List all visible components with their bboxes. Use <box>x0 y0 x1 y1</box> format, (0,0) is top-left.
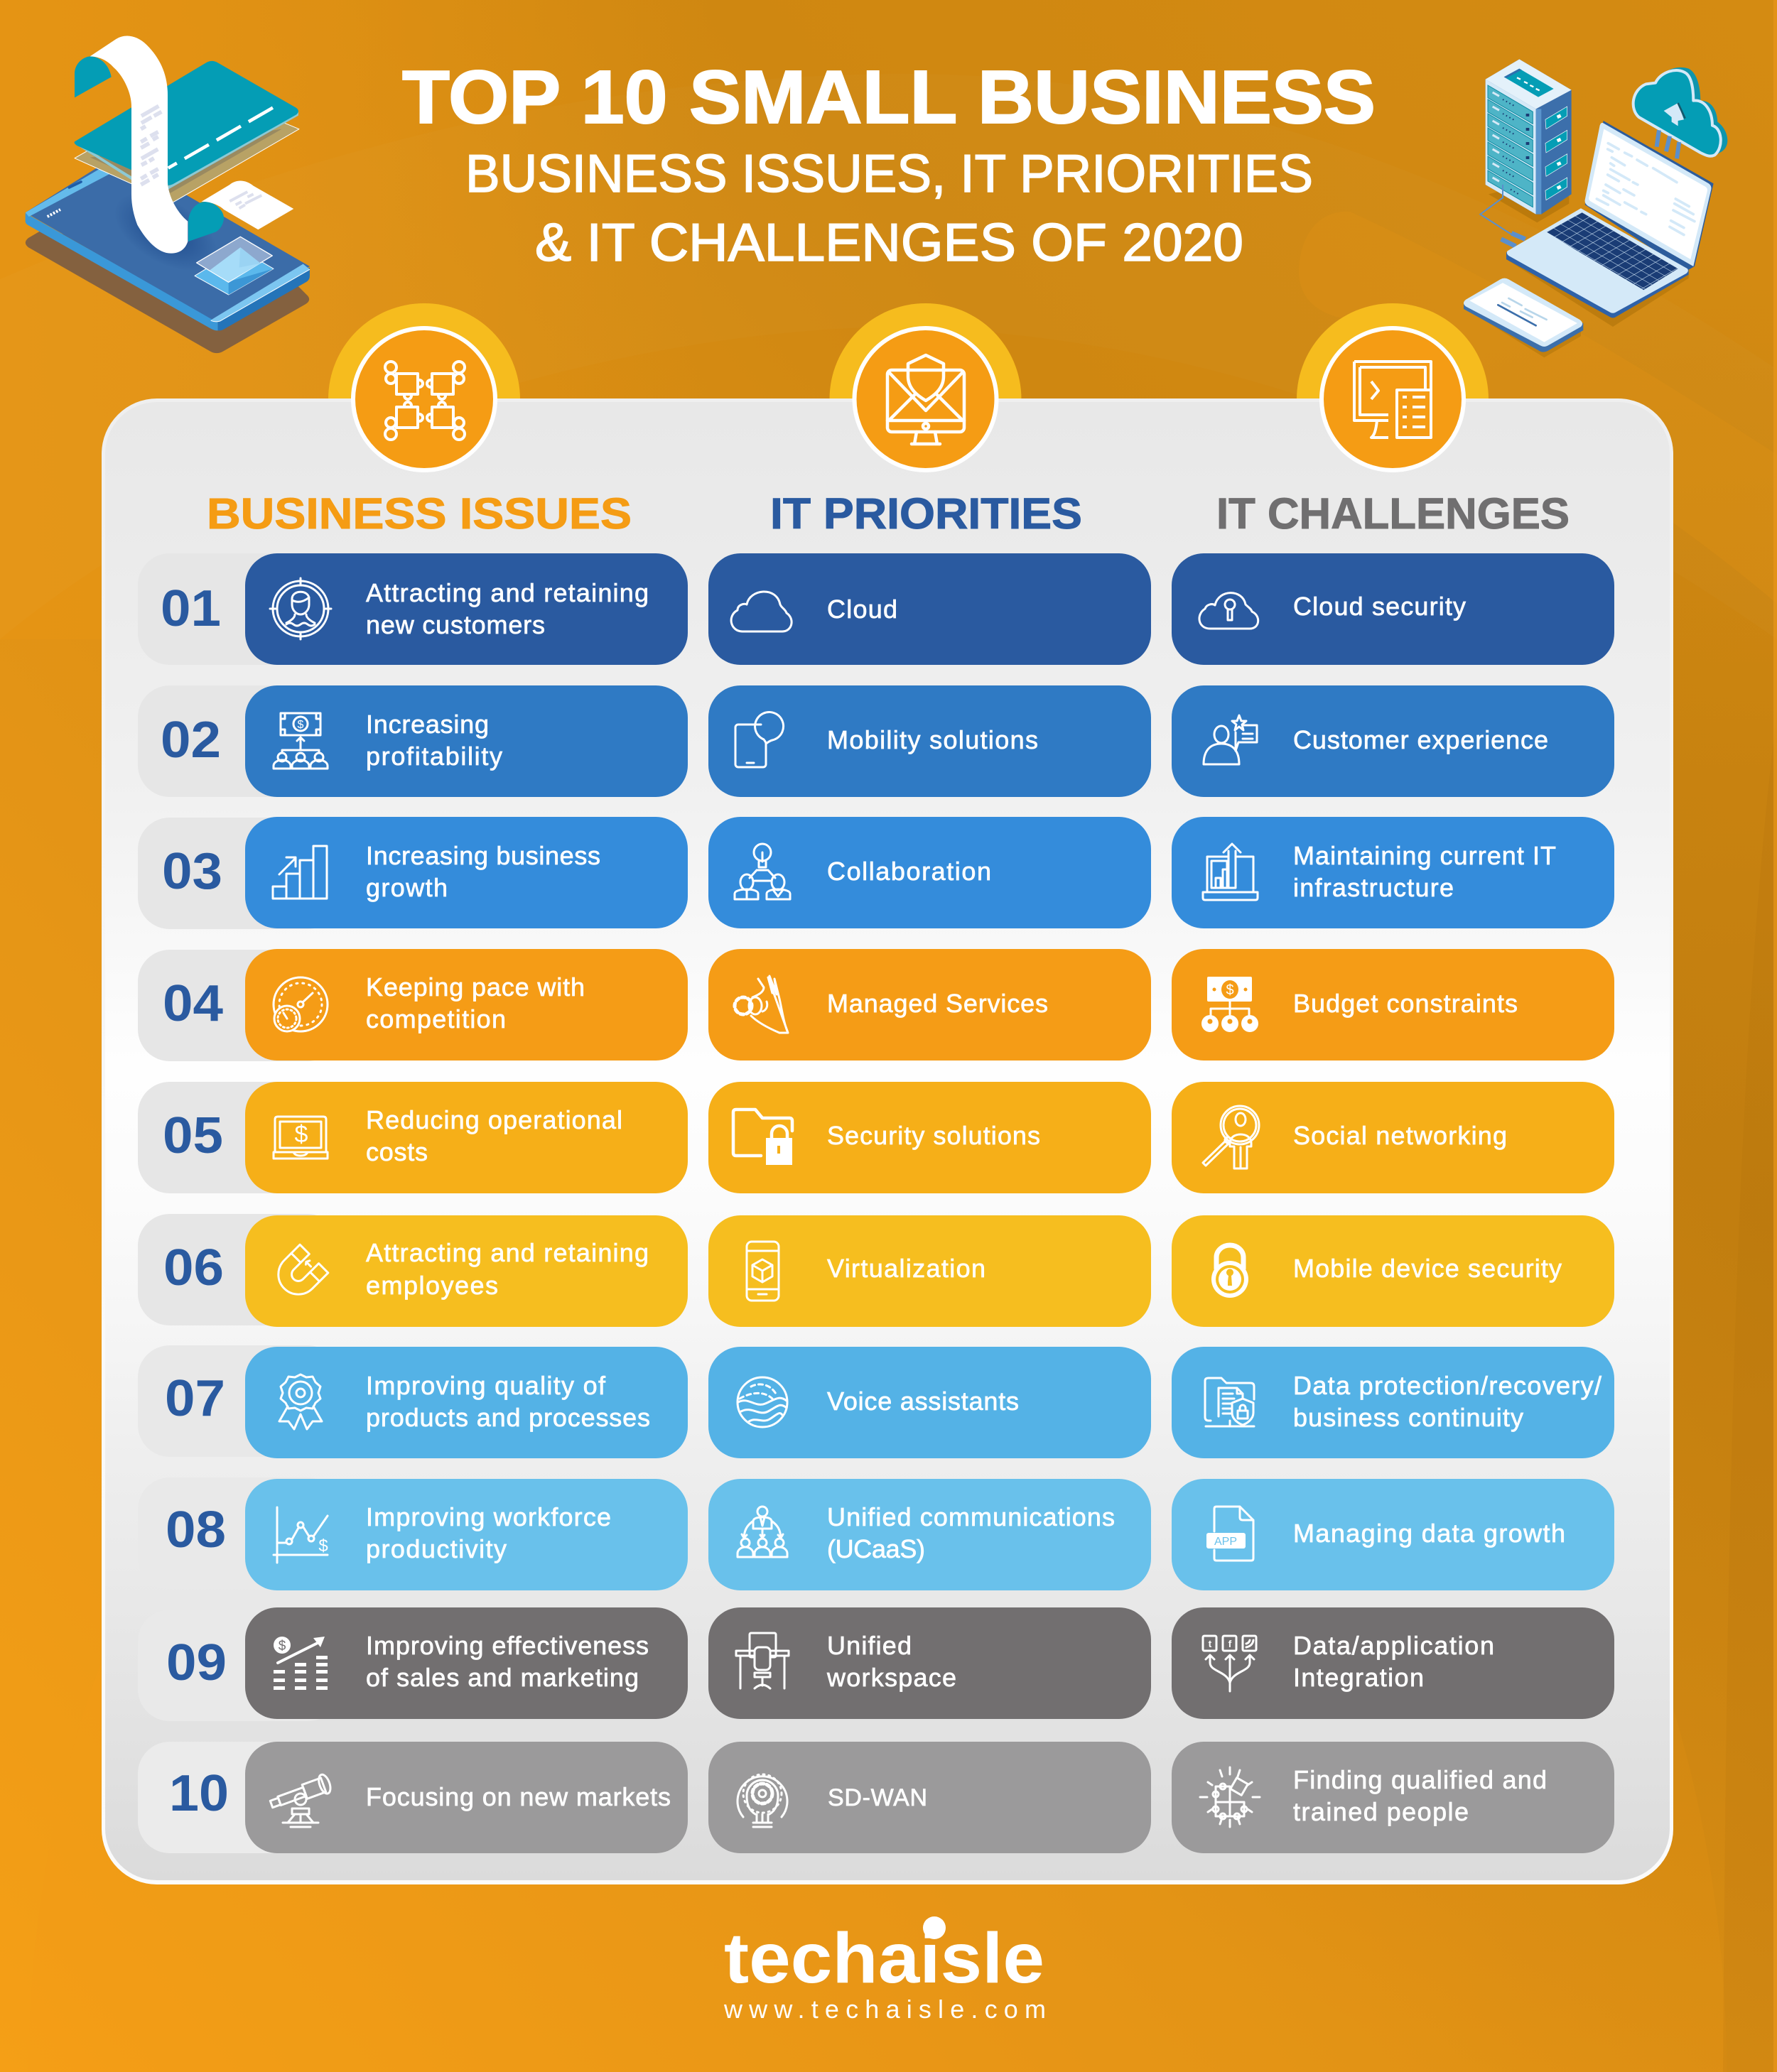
pill: data application integration: Integration <box>1293 1663 1424 1692</box>
rank 09 <box>138 1610 340 1721</box>
pill: maintaining current it infrastructure <box>1172 817 1614 928</box>
rank 01: 01 <box>161 580 221 637</box>
illustration: server, laptop, tablet and cloud <box>1464 59 1727 357</box>
pill: reducing operational costs: Reducing operational <box>366 1105 622 1134</box>
icon: globe with waves <box>738 1377 787 1427</box>
icon: money bill with people: $ <box>1226 982 1234 998</box>
pill: voice assistants: Voice assistants <box>827 1387 1019 1416</box>
row 05 <box>138 1082 1614 1193</box>
icon: three sources merging <box>1203 1636 1256 1691</box>
rank 02: 02 <box>161 712 221 769</box>
icon: app file <box>1206 1507 1253 1561</box>
pill: keeping pace with competition: competition <box>366 1004 506 1034</box>
pill: unified workspace: workspace <box>826 1663 956 1692</box>
row 02 <box>138 685 1614 797</box>
server tower <box>1486 59 1572 215</box>
icon: bar growth <box>273 846 327 899</box>
icon: phone and speech bubble <box>735 712 784 767</box>
rank 04 <box>138 950 340 1061</box>
pill: attracting and retaining new customers: new customers <box>366 610 545 639</box>
pill: unified communications <box>708 1479 1151 1590</box>
pill: social networking: Social networking <box>1293 1121 1507 1150</box>
pill: managed services <box>708 949 1151 1061</box>
pill: maintaining current it infrastructure: Maintaining current IT <box>1293 841 1556 870</box>
icon: target customer <box>270 578 331 639</box>
icon: rising bars and coin <box>274 1637 328 1690</box>
icon: rising bars and coin: $ <box>279 1639 286 1654</box>
icon: team around light bulb <box>735 844 790 899</box>
pill: data protection recovery business continuity: business continuity <box>1293 1403 1523 1432</box>
pill: budget constraints <box>1172 949 1614 1061</box>
icon: hand ok sign with gear <box>735 976 788 1033</box>
icon: horseshoe magnet <box>270 1244 328 1303</box>
pill: cloud security: Cloud security <box>1293 592 1466 621</box>
illustration: phone with credit card and receipt <box>26 36 310 353</box>
icon: cloud <box>731 592 792 631</box>
icon: laptop with dollar <box>274 1117 328 1159</box>
pill: maintaining current it infrastructure: infrastructure <box>1293 873 1454 902</box>
rank 04: 04 <box>163 975 223 1032</box>
pill: mobile device security <box>1172 1215 1614 1327</box>
pill: sd-wan: SD-WAN <box>828 1784 927 1811</box>
icon: desk and office chair <box>736 1633 789 1688</box>
pill: cloud: Cloud <box>827 595 897 624</box>
rank 03: 03 <box>162 843 222 900</box>
tablet <box>1464 278 1583 352</box>
yellow halos behind column badges <box>328 303 1489 495</box>
rank 06: 06 <box>163 1240 224 1296</box>
heading: it challenges: IT CHALLENGES <box>1216 489 1570 538</box>
rank 10: 10 <box>169 1765 229 1822</box>
pill: unified communications: Unified communications <box>827 1502 1115 1531</box>
title <box>402 55 1376 272</box>
pill: increasing business growth: Increasing business <box>366 841 600 870</box>
pill: keeping pace with competition <box>245 949 688 1061</box>
pill: improving quality of products and processes <box>245 1347 688 1458</box>
pill: data application integration: Data/application <box>1293 1631 1494 1660</box>
rank 03 <box>138 818 340 929</box>
pill: data protection recovery business continuity <box>1172 1347 1614 1458</box>
pill: attracting and retaining new customers <box>245 553 688 665</box>
pill: collaboration: Collaboration <box>827 857 991 886</box>
icon: app file: APP <box>1214 1536 1237 1548</box>
pill: mobility solutions: Mobility solutions <box>827 725 1038 754</box>
icon: money bill with people <box>1201 977 1258 1032</box>
pill: collaboration <box>708 817 1151 928</box>
icon: puzzle pieces with rays <box>1200 1767 1260 1827</box>
icon: line chart with dollar: $ <box>318 1536 328 1556</box>
footer logo: techaisle: techaisle <box>724 1919 1044 1998</box>
pill: cloud <box>708 553 1151 665</box>
row 07 <box>138 1345 1614 1458</box>
icon: three sources merging: f <box>1228 1638 1232 1649</box>
pill: improving workforce productivity: productivity <box>366 1534 507 1563</box>
pill: mobility solutions <box>708 685 1151 797</box>
rank 10 <box>138 1742 340 1853</box>
icon: padlock <box>1211 1245 1248 1298</box>
title: TOP 10 SMALL BUSINESS <box>402 55 1376 139</box>
icon: laptop with chart and arrow <box>1203 844 1258 900</box>
pill: virtualization: Virtualization <box>827 1254 985 1283</box>
icon: telescope on tripod <box>268 1773 333 1827</box>
pill: data application integration <box>1172 1607 1614 1719</box>
pill: improving effectiveness of sales and marketing: of sales and marketing <box>366 1663 639 1692</box>
badge: it priorities shield mail monitor <box>854 328 996 470</box>
pill: customer experience: Customer experience <box>1293 725 1548 754</box>
pill: cloud security <box>1172 553 1614 665</box>
pill: unified workspace <box>708 1607 1151 1719</box>
pill: sd-wan <box>708 1742 1151 1853</box>
pill: improving quality of products and processes: Improving quality of <box>366 1371 606 1400</box>
rank 05 <box>138 1082 340 1193</box>
pill: unified workspace: Unified <box>827 1631 912 1660</box>
pill: focusing on new markets: Focusing on new markets <box>366 1782 671 1811</box>
heading: business issues: BUSINESS ISSUES <box>207 489 632 538</box>
icon: money over team: $ <box>298 719 304 731</box>
row 01 <box>138 553 1614 665</box>
pill: attracting and retaining employees: Attracting and retaining <box>366 1238 649 1267</box>
icon: award rosette <box>279 1374 322 1429</box>
rank 08: 08 <box>166 1502 226 1558</box>
pill: improving effectiveness of sales and marketing <box>245 1607 688 1719</box>
title: BUSINESS ISSUES, IT PRIORITIES <box>465 143 1313 203</box>
pill: security solutions <box>708 1082 1151 1193</box>
laptop <box>1506 121 1714 318</box>
main panel <box>102 398 1673 1884</box>
cloud <box>1633 67 1727 158</box>
pill: improving workforce productivity: Improving workforce <box>366 1502 611 1531</box>
pill: increasing business growth <box>245 817 688 928</box>
icon: cloud with keyhole <box>1199 593 1258 629</box>
pill: improving quality of products and processes: products and processes <box>366 1403 650 1432</box>
pill: reducing operational costs: costs <box>366 1137 428 1166</box>
pill: focusing on new markets <box>245 1742 688 1853</box>
pill: attracting and retaining employees <box>245 1215 688 1327</box>
badge: it challenges monitor and list <box>1322 328 1464 470</box>
row 03 <box>138 817 1614 929</box>
pill: increasing business growth: growth <box>366 873 448 902</box>
icon: three sources merging: t <box>1209 1638 1212 1649</box>
row 08 <box>138 1477 1614 1590</box>
rank 05: 05 <box>163 1107 223 1164</box>
icon: speedometers <box>274 977 328 1031</box>
icon: person with chat and star <box>1204 715 1257 764</box>
pill: improving effectiveness of sales and marketing: Improving effectiveness <box>366 1631 649 1660</box>
pill: customer experience <box>1172 685 1614 797</box>
icon: laptop with dollar: $ <box>295 1121 308 1148</box>
icon: line chart with dollar <box>274 1507 328 1563</box>
pill: finding qualified and trained people: trained people <box>1293 1797 1469 1826</box>
pill: voice assistants <box>708 1347 1151 1458</box>
heading: it priorities: IT PRIORITIES <box>770 489 1082 538</box>
pill: social networking <box>1172 1082 1614 1193</box>
rank 09: 09 <box>166 1634 227 1691</box>
pill: unified communications: (UCaaS) <box>827 1534 925 1563</box>
pill: attracting and retaining employees: employees <box>366 1271 498 1300</box>
badge: business issues puzzle <box>353 328 495 470</box>
row 04 <box>138 949 1614 1061</box>
row 06 <box>138 1214 1614 1327</box>
rank 07 <box>138 1345 340 1457</box>
rank 06 <box>138 1214 340 1325</box>
pill: virtualization <box>708 1215 1151 1327</box>
pill: increasing profitability: profitability <box>366 742 502 771</box>
pill: mobile device security: Mobile device security <box>1293 1254 1562 1283</box>
pill: attracting and retaining new customers: Attracting and retaining <box>366 578 649 607</box>
icon: light bulb with gear <box>738 1774 787 1827</box>
pill: keeping pace with competition: Keeping pace with <box>366 972 585 1002</box>
rank 02 <box>138 685 340 797</box>
title: & IT CHALLENGES OF 2020 <box>535 212 1243 272</box>
pill: managed services: Managed Services <box>827 989 1048 1018</box>
pill: finding qualified and trained people <box>1172 1742 1614 1853</box>
footer url: www.techaisle.com <box>723 1995 1046 2024</box>
icon: money over team <box>274 713 328 769</box>
pill: budget constraints: Budget constraints <box>1293 989 1518 1018</box>
row 10 <box>138 1742 1614 1853</box>
pill: increasing profitability: Increasing <box>366 710 489 739</box>
rank 07: 07 <box>165 1370 225 1427</box>
pill: finding qualified and trained people: Finding qualified and <box>1293 1765 1547 1794</box>
pill: data protection recovery business continuity: Data protection/recovery/ <box>1293 1371 1602 1400</box>
pill: improving workforce productivity <box>245 1479 688 1590</box>
icon: folder with padlock <box>733 1110 792 1165</box>
icon: leader with three team members <box>738 1507 787 1557</box>
pill: managing data growth: Managing data growth <box>1293 1519 1565 1548</box>
pill: security solutions: Security solutions <box>827 1121 1040 1150</box>
icon: magnifier over person <box>1203 1106 1259 1168</box>
pill: increasing profitability <box>245 685 688 797</box>
rank 08 <box>138 1477 340 1589</box>
rank 01 <box>138 553 340 665</box>
icon: phone with cube <box>747 1242 779 1301</box>
pill: managing data growth <box>1172 1479 1614 1590</box>
row 09 <box>138 1607 1614 1721</box>
cable <box>1480 185 1511 234</box>
icon: folder document and shield <box>1205 1378 1254 1426</box>
pill: reducing operational costs <box>245 1082 688 1193</box>
